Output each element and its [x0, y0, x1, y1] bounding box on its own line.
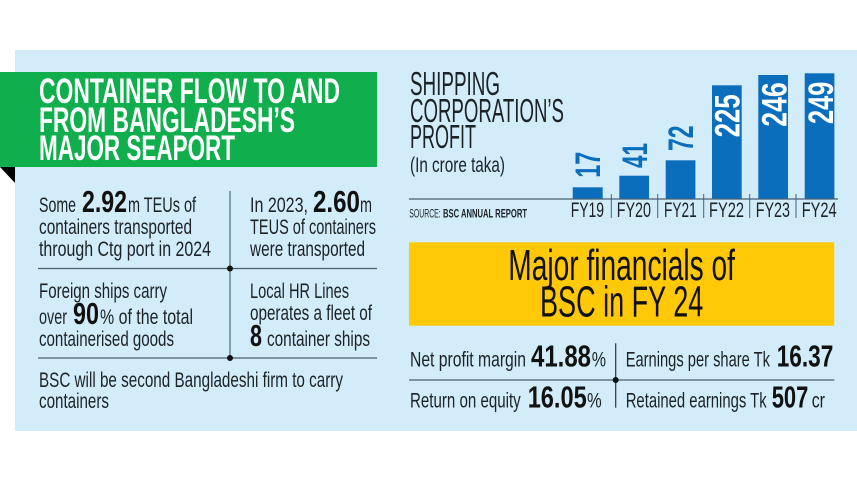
bar values: 246	[756, 82, 794, 127]
year labels: FY24	[802, 199, 837, 222]
title banner: CONTAINER FLOW TO AND	[39, 72, 340, 111]
fact: foreign ships carry 90%: % of the total	[100, 305, 193, 329]
source note	[409, 207, 527, 221]
metric: net profit margin: 41.88	[531, 340, 591, 374]
panel: container flow	[0, 72, 377, 413]
metric: net profit margin	[410, 340, 606, 374]
chart heading: SHIPPING	[410, 65, 500, 102]
chart heading: PROFIT	[410, 118, 476, 155]
fact: 2.92m TEUs in 2024: 2.92	[82, 185, 127, 219]
year labels: FY22	[709, 199, 744, 222]
fact: foreign ships carry 90%	[39, 279, 193, 351]
fact: 2.92m TEUs in 2024: containers transported	[39, 215, 192, 239]
year labels	[571, 199, 837, 222]
fact: BSC second firm	[39, 368, 343, 413]
yellow heading: major financials: Major financials of	[508, 241, 735, 290]
metric: retained earnings: Retained earnings Tk	[626, 389, 767, 413]
fact: 2.60m TEUs in 2023: In 2023,	[250, 193, 308, 217]
fact: 2.60m TEUs in 2023: were transported	[249, 237, 365, 261]
metric: return on equity: Return on equity	[410, 389, 521, 413]
chart heading: CORPORATION’S	[410, 92, 564, 129]
background panel	[15, 50, 857, 431]
metric: net profit margin: %	[592, 348, 606, 372]
bars	[573, 73, 834, 198]
metric: retained earnings: 507	[772, 381, 808, 415]
bar values: 17	[569, 152, 608, 178]
fact: 2.60m TEUs in 2023: TEUS of containers	[250, 215, 376, 239]
fact: HR Lines fleet of 8: Local HR Lines	[250, 279, 349, 303]
metric: retained earnings: cr	[812, 389, 825, 413]
source note: BSC ANNUAL REPORT	[443, 207, 527, 221]
yellow heading: major financials	[409, 241, 834, 327]
title banner: MAJOR SEAPORT	[39, 129, 235, 168]
fact: foreign ships carry 90%: Foreign ships carry	[39, 279, 167, 303]
bar values: 225	[708, 94, 748, 137]
fact: foreign ships carry 90%: containerised goods	[39, 327, 174, 351]
fact: HR Lines fleet of 8: container ships	[267, 327, 370, 351]
fact: BSC second firm: containers	[39, 389, 109, 413]
title banner	[0, 72, 377, 183]
fact: foreign ships carry 90%: over	[39, 305, 67, 329]
fact: BSC second firm: BSC will be second Bangladeshi firm to carry	[39, 368, 343, 392]
metric: earnings per share: Earnings per share Tk	[626, 348, 770, 372]
chart heading: (In crore taka)	[410, 153, 505, 177]
metric: return on equity: %	[587, 389, 602, 413]
year labels: FY23	[756, 199, 790, 222]
grid lines with dots	[38, 191, 377, 361]
fact: HR Lines fleet of 8: 8	[250, 319, 262, 353]
bar chart: profit	[409, 73, 841, 222]
fact: foreign ships carry 90%: 90	[73, 297, 99, 331]
year labels: FY20	[617, 199, 651, 222]
fact: 2.60m TEUs in 2023	[249, 185, 376, 261]
bar values	[569, 82, 841, 178]
metric: retained earnings	[626, 381, 825, 415]
metric: return on equity	[410, 381, 602, 415]
year labels: FY21	[664, 199, 697, 222]
fact: 2.92m TEUs in 2024	[39, 185, 211, 261]
axis and ticks	[409, 194, 838, 218]
metric: earnings per share	[626, 340, 833, 374]
metric: return on equity: 16.05	[528, 381, 587, 415]
chart heading	[410, 65, 564, 177]
metric: earnings per share: 16.37	[777, 340, 833, 374]
source note: SOURCE:	[409, 207, 441, 221]
metric dividers	[409, 343, 834, 408]
year labels: FY19	[571, 199, 604, 222]
metric: net profit margin: Net profit margin	[410, 348, 526, 372]
yellow heading: major financials: BSC in FY 24	[540, 278, 703, 327]
fact: HR Lines fleet of 8	[250, 279, 372, 353]
bar values: 249	[802, 82, 841, 124]
fact: 2.60m TEUs in 2023: 2.60	[313, 185, 360, 219]
fact: HR Lines fleet of 8: operates a fleet of	[250, 301, 372, 325]
bar values: 72	[662, 126, 701, 151]
title banner: FROM BANGLADESH’S	[39, 101, 295, 140]
bar values: 41	[616, 143, 655, 168]
fact: 2.92m TEUs in 2024: through Ctg port in 2024	[39, 237, 211, 261]
fact: 2.60m TEUs in 2023: m	[360, 193, 372, 217]
fact: 2.92m TEUs in 2024: m TEUs of	[128, 193, 196, 217]
fact: 2.92m TEUs in 2024: Some	[39, 193, 76, 217]
panel: financial metrics	[409, 340, 834, 415]
